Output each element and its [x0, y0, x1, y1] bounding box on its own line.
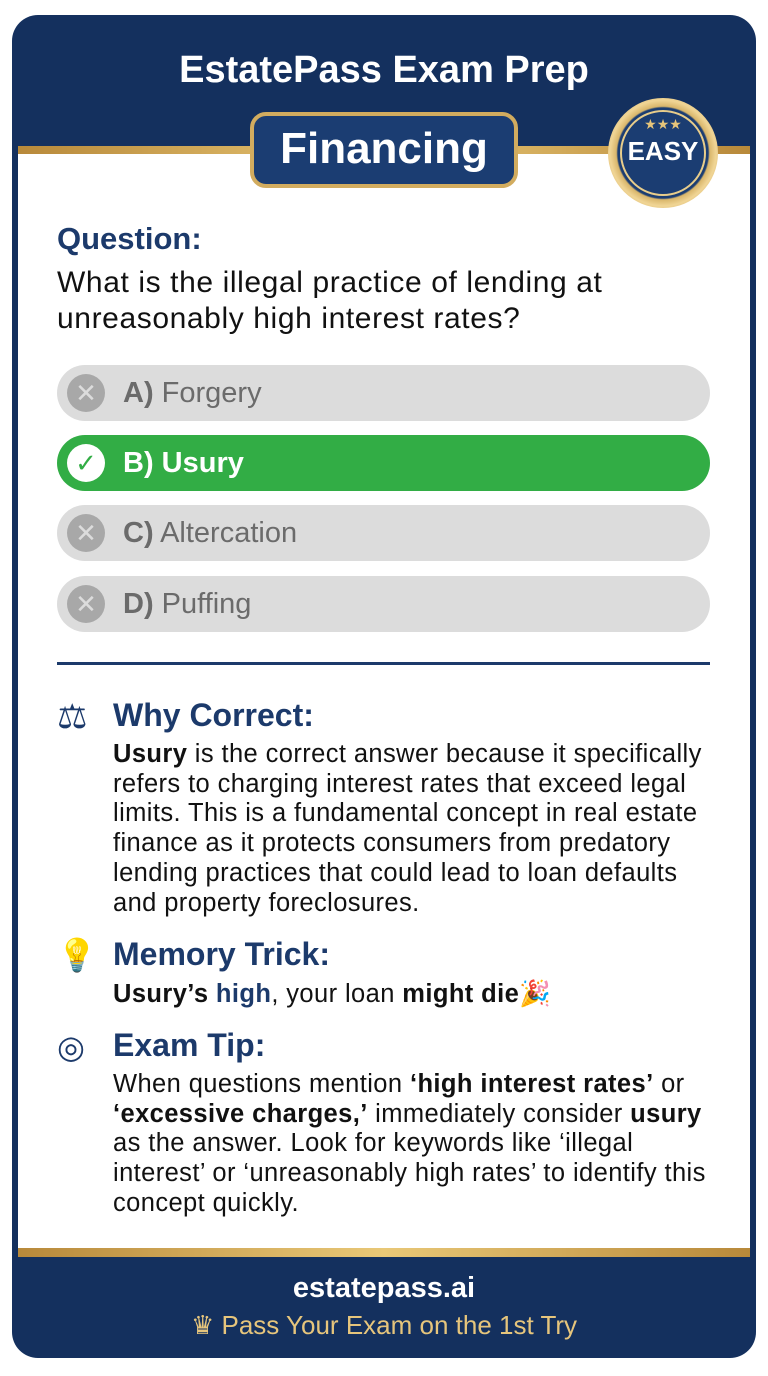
option C: ✕: [75, 518, 97, 548]
difficulty seal: ★★★: [644, 116, 682, 132]
exam tip body: as the answer. Look for keywords like ‘illegal: [113, 1129, 633, 1157]
option A: A) Forgery: [123, 377, 262, 409]
header title: EstatePass Exam Prep: [179, 49, 589, 91]
footer site: estatepass.ai: [293, 1272, 475, 1304]
icon: scales: ⚖: [57, 698, 87, 736]
option C: [57, 505, 710, 561]
question label: Question:: [57, 221, 202, 256]
why correct body: refers to charging interest rates that exceed legal: [113, 770, 686, 798]
white content area: [18, 154, 750, 1248]
question text: unreasonably high interest rates?: [57, 302, 520, 335]
option B correct: [57, 435, 710, 491]
why correct body: lending practices that could lead to loan defaults: [113, 859, 677, 887]
option D: D) Puffing: [123, 588, 251, 620]
difficulty seal: EASY: [628, 136, 698, 166]
exam tip body: concept quickly.: [113, 1189, 299, 1217]
question text: What is the illegal practice of lending at: [57, 266, 602, 299]
exam tip body: When questions mention ‘high interest rates’ or: [113, 1070, 685, 1098]
header gold line: [18, 146, 750, 154]
why correct body: [113, 740, 702, 917]
exam tip body: interest’ or ‘unreasonably high rates’ to identify this: [113, 1159, 706, 1187]
why correct body: and property foreclosures.: [113, 889, 420, 917]
option D: ✕: [75, 589, 97, 619]
question text: [57, 266, 602, 335]
why correct heading: Why Correct:: [113, 697, 314, 733]
exam tip body: [113, 1070, 706, 1217]
icon: target: ◎: [57, 1029, 85, 1065]
option B correct: ✓: [75, 448, 97, 478]
option A: ✕: [75, 378, 97, 408]
why correct body: limits. This is a fundamental concept in real estate: [113, 799, 697, 827]
category badge: [250, 112, 518, 188]
option B correct: B) Usury: [123, 447, 244, 479]
option D: [57, 576, 710, 632]
why correct body: Usury is the correct answer because it specifically: [113, 740, 702, 768]
option A: [57, 365, 710, 421]
icon: lightbulb: 💡: [57, 937, 97, 973]
why correct body: finance as it protects consumers from predatory: [113, 829, 670, 857]
memory trick text: Usury’s high, your loan might die🎉: [113, 980, 551, 1008]
exam tip heading: Exam Tip:: [113, 1027, 265, 1063]
memory trick heading: Memory Trick:: [113, 936, 330, 972]
exam tip body: ‘excessive charges,’ immediately consider usury: [113, 1100, 702, 1128]
difficulty seal: [608, 98, 718, 208]
footer gold line: [18, 1248, 750, 1257]
footer tagline: ♛ Pass Your Exam on the 1st Try: [191, 1310, 577, 1340]
option C: C) Altercation: [123, 517, 297, 549]
category badge: Financing: [280, 124, 488, 173]
